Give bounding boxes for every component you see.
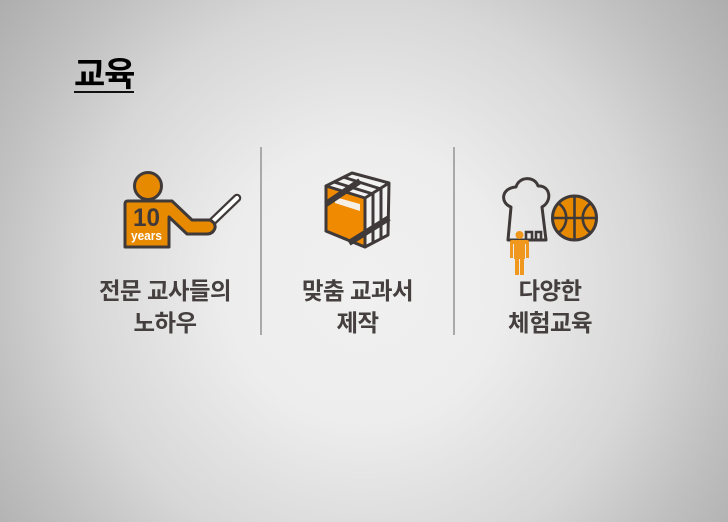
- text: expert teachers: 전문 교사들의: [99, 278, 231, 304]
- text: expert teachers: [99, 278, 231, 336]
- text: custom textbooks: 제작: [336, 310, 379, 336]
- text: diverse experiential education: [508, 278, 592, 336]
- icon: teacher with 10 years badge and pointer: 10: [133, 204, 160, 232]
- text: diverse experiential education: 다양한: [518, 278, 582, 304]
- text: custom textbooks: [302, 278, 413, 336]
- text: diverse experiential education: 체험교육: [508, 310, 592, 336]
- text: expert teachers: 노하우: [133, 310, 197, 336]
- text: custom textbooks: 맞춤 교과서: [302, 278, 413, 304]
- title: 교육: [74, 56, 134, 94]
- icon: teacher with 10 years badge and pointer: years: [131, 229, 162, 243]
